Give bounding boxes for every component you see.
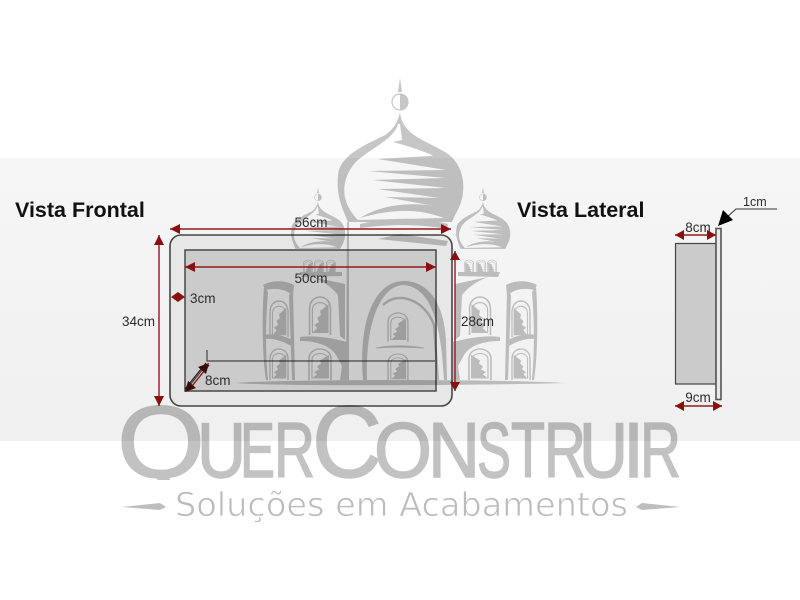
dimension: 1cm plate callout xyxy=(718,195,777,226)
inner recess xyxy=(185,250,436,391)
dimension: 8cm side xyxy=(675,220,716,240)
panel: front view xyxy=(170,235,452,406)
dimension: 9cm side xyxy=(675,390,722,411)
side front plate xyxy=(716,228,721,400)
dimension: 8cm depth: 8cm xyxy=(205,373,231,388)
dimension: 56cm width xyxy=(170,215,451,234)
logo: QuerConstruir: T xyxy=(511,406,545,494)
logo: QuerConstruir: U xyxy=(579,406,628,494)
logo: QuerConstruir: O xyxy=(374,406,432,494)
logo tagline: Soluções em Acabamentos xyxy=(175,485,628,524)
logo: QuerConstruir: U xyxy=(197,406,246,494)
dimension: 34cm height: 34cm xyxy=(122,314,155,329)
logo: QuerConstruir: R xyxy=(544,406,586,494)
dimension: 8cm depth xyxy=(185,363,231,392)
logo: QuerConstruir: Q xyxy=(117,385,205,499)
dimension: 50cm width xyxy=(185,262,436,286)
shelf depth lines xyxy=(186,350,435,390)
dimension: 34cm height xyxy=(122,235,164,406)
dimension: 8cm side: 8cm xyxy=(685,220,711,235)
dimension: 56cm width: 56cm xyxy=(294,215,328,230)
dimension: 3cm border xyxy=(171,291,216,306)
dimension: 28cm height: 28cm xyxy=(461,314,494,329)
left tagline arrow xyxy=(122,503,166,510)
logo: QuerConstruir: R xyxy=(274,406,315,494)
side body xyxy=(676,244,716,384)
watermark: temple illustration xyxy=(235,78,565,385)
dimension: 28cm height xyxy=(450,251,494,391)
dimension: 9cm side: 9cm xyxy=(685,390,711,405)
dimension: 1cm plate callout: 1cm xyxy=(743,195,767,209)
logo: QuerConstruir: C xyxy=(312,385,382,499)
logo: QuerConstruir: S xyxy=(477,406,511,494)
logo: QuerConstruir: E xyxy=(240,406,275,494)
title: Vista Lateral: Vista Lateral xyxy=(517,198,644,222)
logo: QuerConstruir: I xyxy=(623,406,644,494)
outer frame xyxy=(170,235,452,406)
logo: QuerConstruir: N xyxy=(428,406,480,494)
title: Vista Frontal: Vista Frontal xyxy=(15,198,145,222)
logo: QuerConstruir: R xyxy=(640,406,681,494)
right tagline arrow xyxy=(636,503,680,510)
dimension: 3cm border: 3cm xyxy=(190,291,216,306)
background band xyxy=(0,158,800,441)
dimension: 50cm width: 50cm xyxy=(294,271,328,286)
logo: QuerConstruir xyxy=(122,405,680,480)
panel: side view xyxy=(675,195,777,411)
